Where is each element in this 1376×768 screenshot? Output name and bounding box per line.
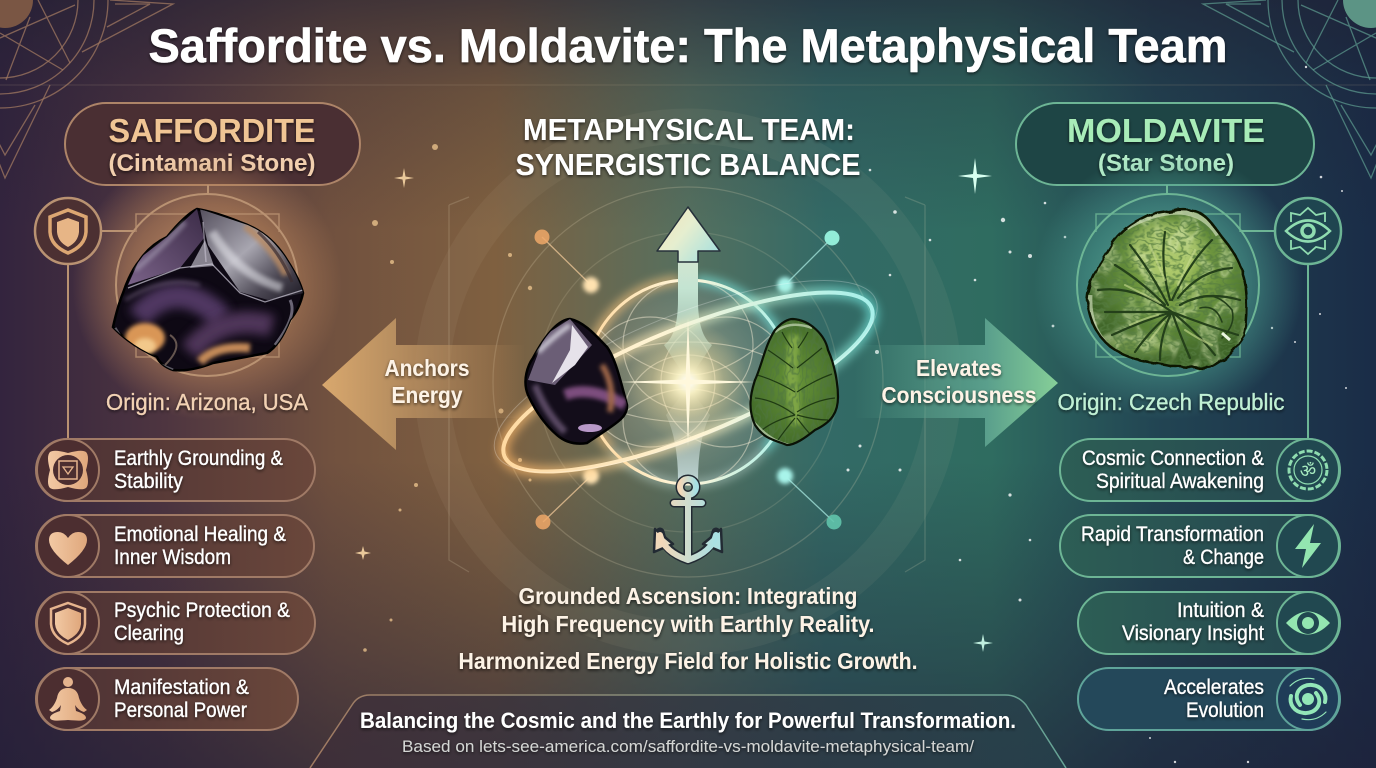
text: origin Czech Republic: Origin: Czech Republic xyxy=(1058,389,1284,415)
panel: Moldavite header: (Star Stone) xyxy=(1098,150,1234,177)
center heading xyxy=(516,112,860,182)
arrow: anchors energy xyxy=(322,318,525,450)
center heading: SYNERGISTIC BALANCE xyxy=(516,147,860,182)
text: grounded ascension: Grounded Ascension: Integrating xyxy=(518,583,858,609)
panel: Moldavite benefits xyxy=(1060,439,1340,730)
arrow: elevates consciousness: Elevates xyxy=(916,355,1002,381)
panel: Moldavite header xyxy=(1016,103,1314,185)
panel: bottom banner: Balancing the Cosmic and the Earthly for Powerful Transformation. xyxy=(360,708,1016,733)
panel: Moldavite header: MOLDAVITE xyxy=(1067,112,1265,149)
text: origin Arizona: Origin: Arizona, USA xyxy=(106,389,309,415)
text: grounded ascension: Harmonized Energy Field for Holistic Growth. xyxy=(458,648,918,674)
diagram: synergy energy field xyxy=(472,207,899,530)
benefit: cosmic connection: Cosmic Connection & xyxy=(1082,447,1264,470)
panel: Saffordite header xyxy=(65,103,360,185)
Moldavite connectors and frame xyxy=(1033,150,1308,440)
panel: bottom banner: Based on lets-see-america.com/saffordite-vs-moldavite-metaphysical-team/ xyxy=(402,737,974,756)
benefit: earthly grounding xyxy=(36,439,315,501)
arrow: anchors energy: Energy xyxy=(392,382,463,408)
benefit: emotional healing xyxy=(36,515,314,577)
benefit: emotional healing: Emotional Healing & xyxy=(114,523,286,546)
energy sphere xyxy=(585,280,791,485)
benefit: manifestation xyxy=(36,668,298,730)
benefit: earthly grounding: Earthly Grounding & xyxy=(114,447,283,470)
decorative corner mandala right xyxy=(1203,0,1376,178)
core flare xyxy=(620,318,755,446)
benefit: rapid transformation: & Change xyxy=(1183,546,1264,569)
benefit: manifestation: Manifestation & xyxy=(114,676,249,699)
benefit: rapid transformation xyxy=(1060,515,1340,577)
icon: third eye badge xyxy=(1275,198,1341,264)
orbit ring xyxy=(472,242,899,511)
benefit: accelerates evolution: Accelerates xyxy=(1164,676,1264,699)
benefit: psychic protection: Psychic Protection & xyxy=(114,599,290,622)
benefit: psychic protection xyxy=(36,592,315,654)
benefit: emotional healing: Inner Wisdom xyxy=(114,546,231,569)
Saffordite connectors and frame xyxy=(68,150,342,440)
panel: bottom banner xyxy=(310,695,1066,768)
stars xyxy=(363,66,1347,763)
benefit: rapid transformation: Rapid Transformation xyxy=(1081,523,1264,546)
benefit: intuition xyxy=(1078,592,1340,654)
image: small Moldavite stone xyxy=(749,318,840,446)
text: grounded ascension xyxy=(458,583,918,674)
text: grounded ascension: High Frequency with Earthly Reality. xyxy=(502,611,874,637)
arrow: elevates consciousness xyxy=(855,318,1058,447)
benefit: cosmic connection: Spiritual Awakening xyxy=(1096,470,1264,493)
benefit: manifestation: Personal Power xyxy=(114,699,247,722)
panel: Saffordite benefits xyxy=(36,439,315,730)
center heading: METAPHYSICAL TEAM: xyxy=(523,112,855,147)
benefit: psychic protection: Clearing xyxy=(114,622,184,645)
image: Moldavite stone xyxy=(1085,208,1248,370)
benefit: intuition: Visionary Insight xyxy=(1122,622,1264,645)
benefit: accelerates evolution: Evolution xyxy=(1186,699,1264,722)
sparkles xyxy=(355,158,993,652)
benefit: cosmic connection: ॐ xyxy=(1300,461,1316,481)
panel: Saffordite header: (Cintamani Stone) xyxy=(108,150,316,177)
icon: anchor xyxy=(654,479,722,560)
title: Saffordite vs. Moldavite: The Metaphysical Team xyxy=(148,19,1228,72)
constellation nodes xyxy=(534,230,842,530)
image: Saffordite stone xyxy=(113,209,304,370)
benefit: earthly grounding: Stability xyxy=(114,470,183,493)
panel: Saffordite header: SAFFORDITE xyxy=(108,112,316,149)
upward arrow xyxy=(657,207,720,480)
icon: shield badge xyxy=(35,198,101,264)
benefit: accelerates evolution xyxy=(1078,668,1340,730)
image: small Saffordite stone xyxy=(525,319,627,444)
decorative corner mandala left xyxy=(0,0,173,178)
arrow: anchors energy: Anchors xyxy=(384,355,470,381)
center orbit rings background xyxy=(432,126,944,638)
arrow: elevates consciousness: Consciousness xyxy=(882,382,1036,408)
benefit: cosmic connection xyxy=(1060,439,1340,501)
benefit: intuition: Intuition & xyxy=(1177,599,1264,622)
